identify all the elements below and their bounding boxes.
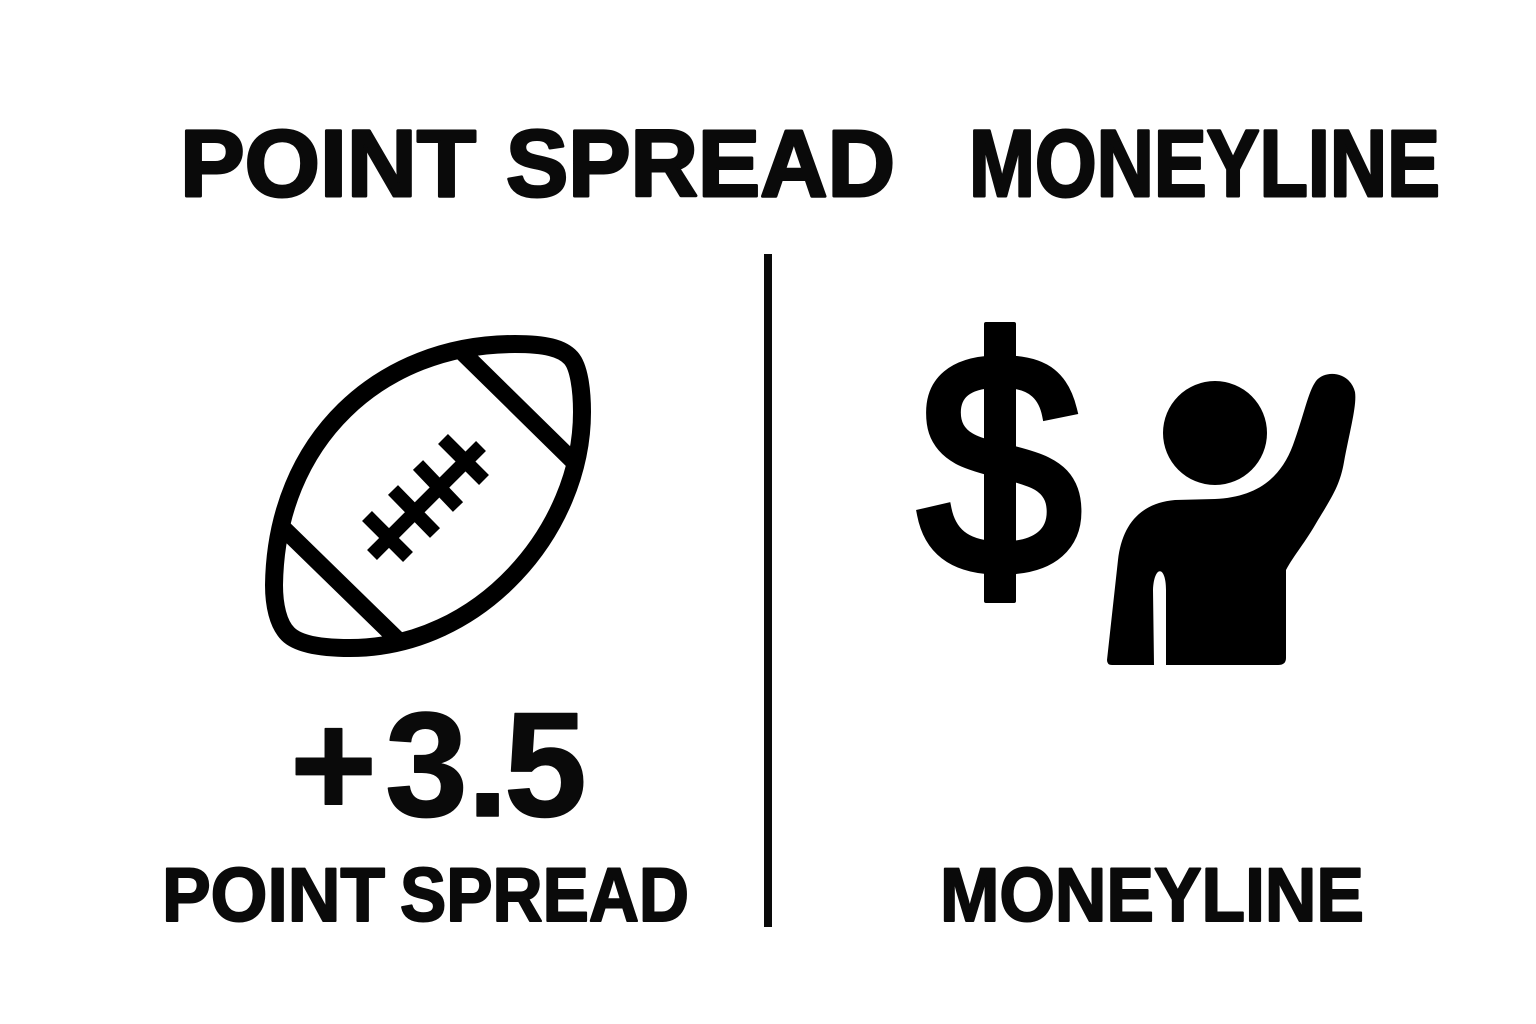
heading: point spread: SPREAD	[506, 111, 895, 217]
value: +3.5: +3.5	[290, 681, 587, 848]
center divider	[764, 254, 772, 927]
heading: moneyline: MONEYLINE	[969, 111, 1440, 217]
icon: football	[274, 344, 582, 648]
label: point spread: SPREAD	[400, 853, 689, 938]
label: point spread: POINT	[162, 853, 385, 938]
icon: person raising hand	[1107, 374, 1355, 665]
label: point spread	[162, 853, 689, 938]
icon: dollar sign: $	[919, 291, 1081, 639]
label: moneyline: MONEYLINE	[940, 853, 1364, 938]
heading: point spread	[180, 111, 895, 217]
heading: point spread: POINT	[180, 111, 476, 217]
